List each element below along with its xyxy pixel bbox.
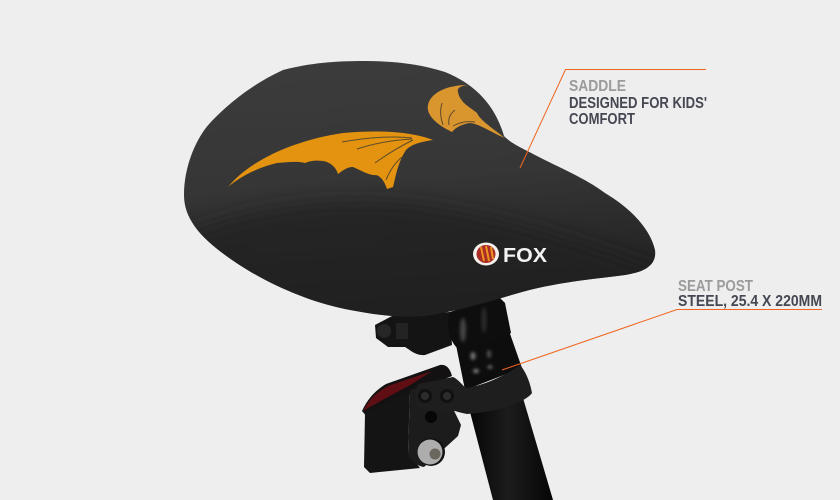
saddle description line 2: COMFORT	[569, 111, 635, 128]
brand logo	[473, 242, 548, 267]
saddle neck collar	[448, 296, 511, 348]
saddle label: SADDLE	[569, 78, 626, 95]
seat post clamp with arm	[415, 365, 532, 414]
saddle	[184, 61, 656, 316]
seat post glossy tube	[455, 328, 522, 390]
saddle description line 1: DESIGNED FOR KIDS'	[569, 95, 707, 112]
large orange wing	[228, 131, 433, 189]
seat post callout text	[678, 278, 822, 310]
infographic canvas	[184, 61, 822, 500]
seat post callout leader	[502, 310, 822, 370]
saddle callout text	[569, 78, 707, 128]
brand name: FOX	[503, 245, 548, 267]
seat post label: SEAT POST	[678, 278, 753, 295]
saddle callout leader	[520, 70, 706, 168]
reflector	[362, 365, 461, 473]
saddle clamp bolt	[375, 312, 452, 355]
small orange wing	[428, 85, 505, 138]
seat post description: STEEL, 25.4 X 220MM	[678, 293, 822, 310]
seat post lower tube	[470, 398, 553, 500]
reflector bolt	[417, 438, 445, 466]
